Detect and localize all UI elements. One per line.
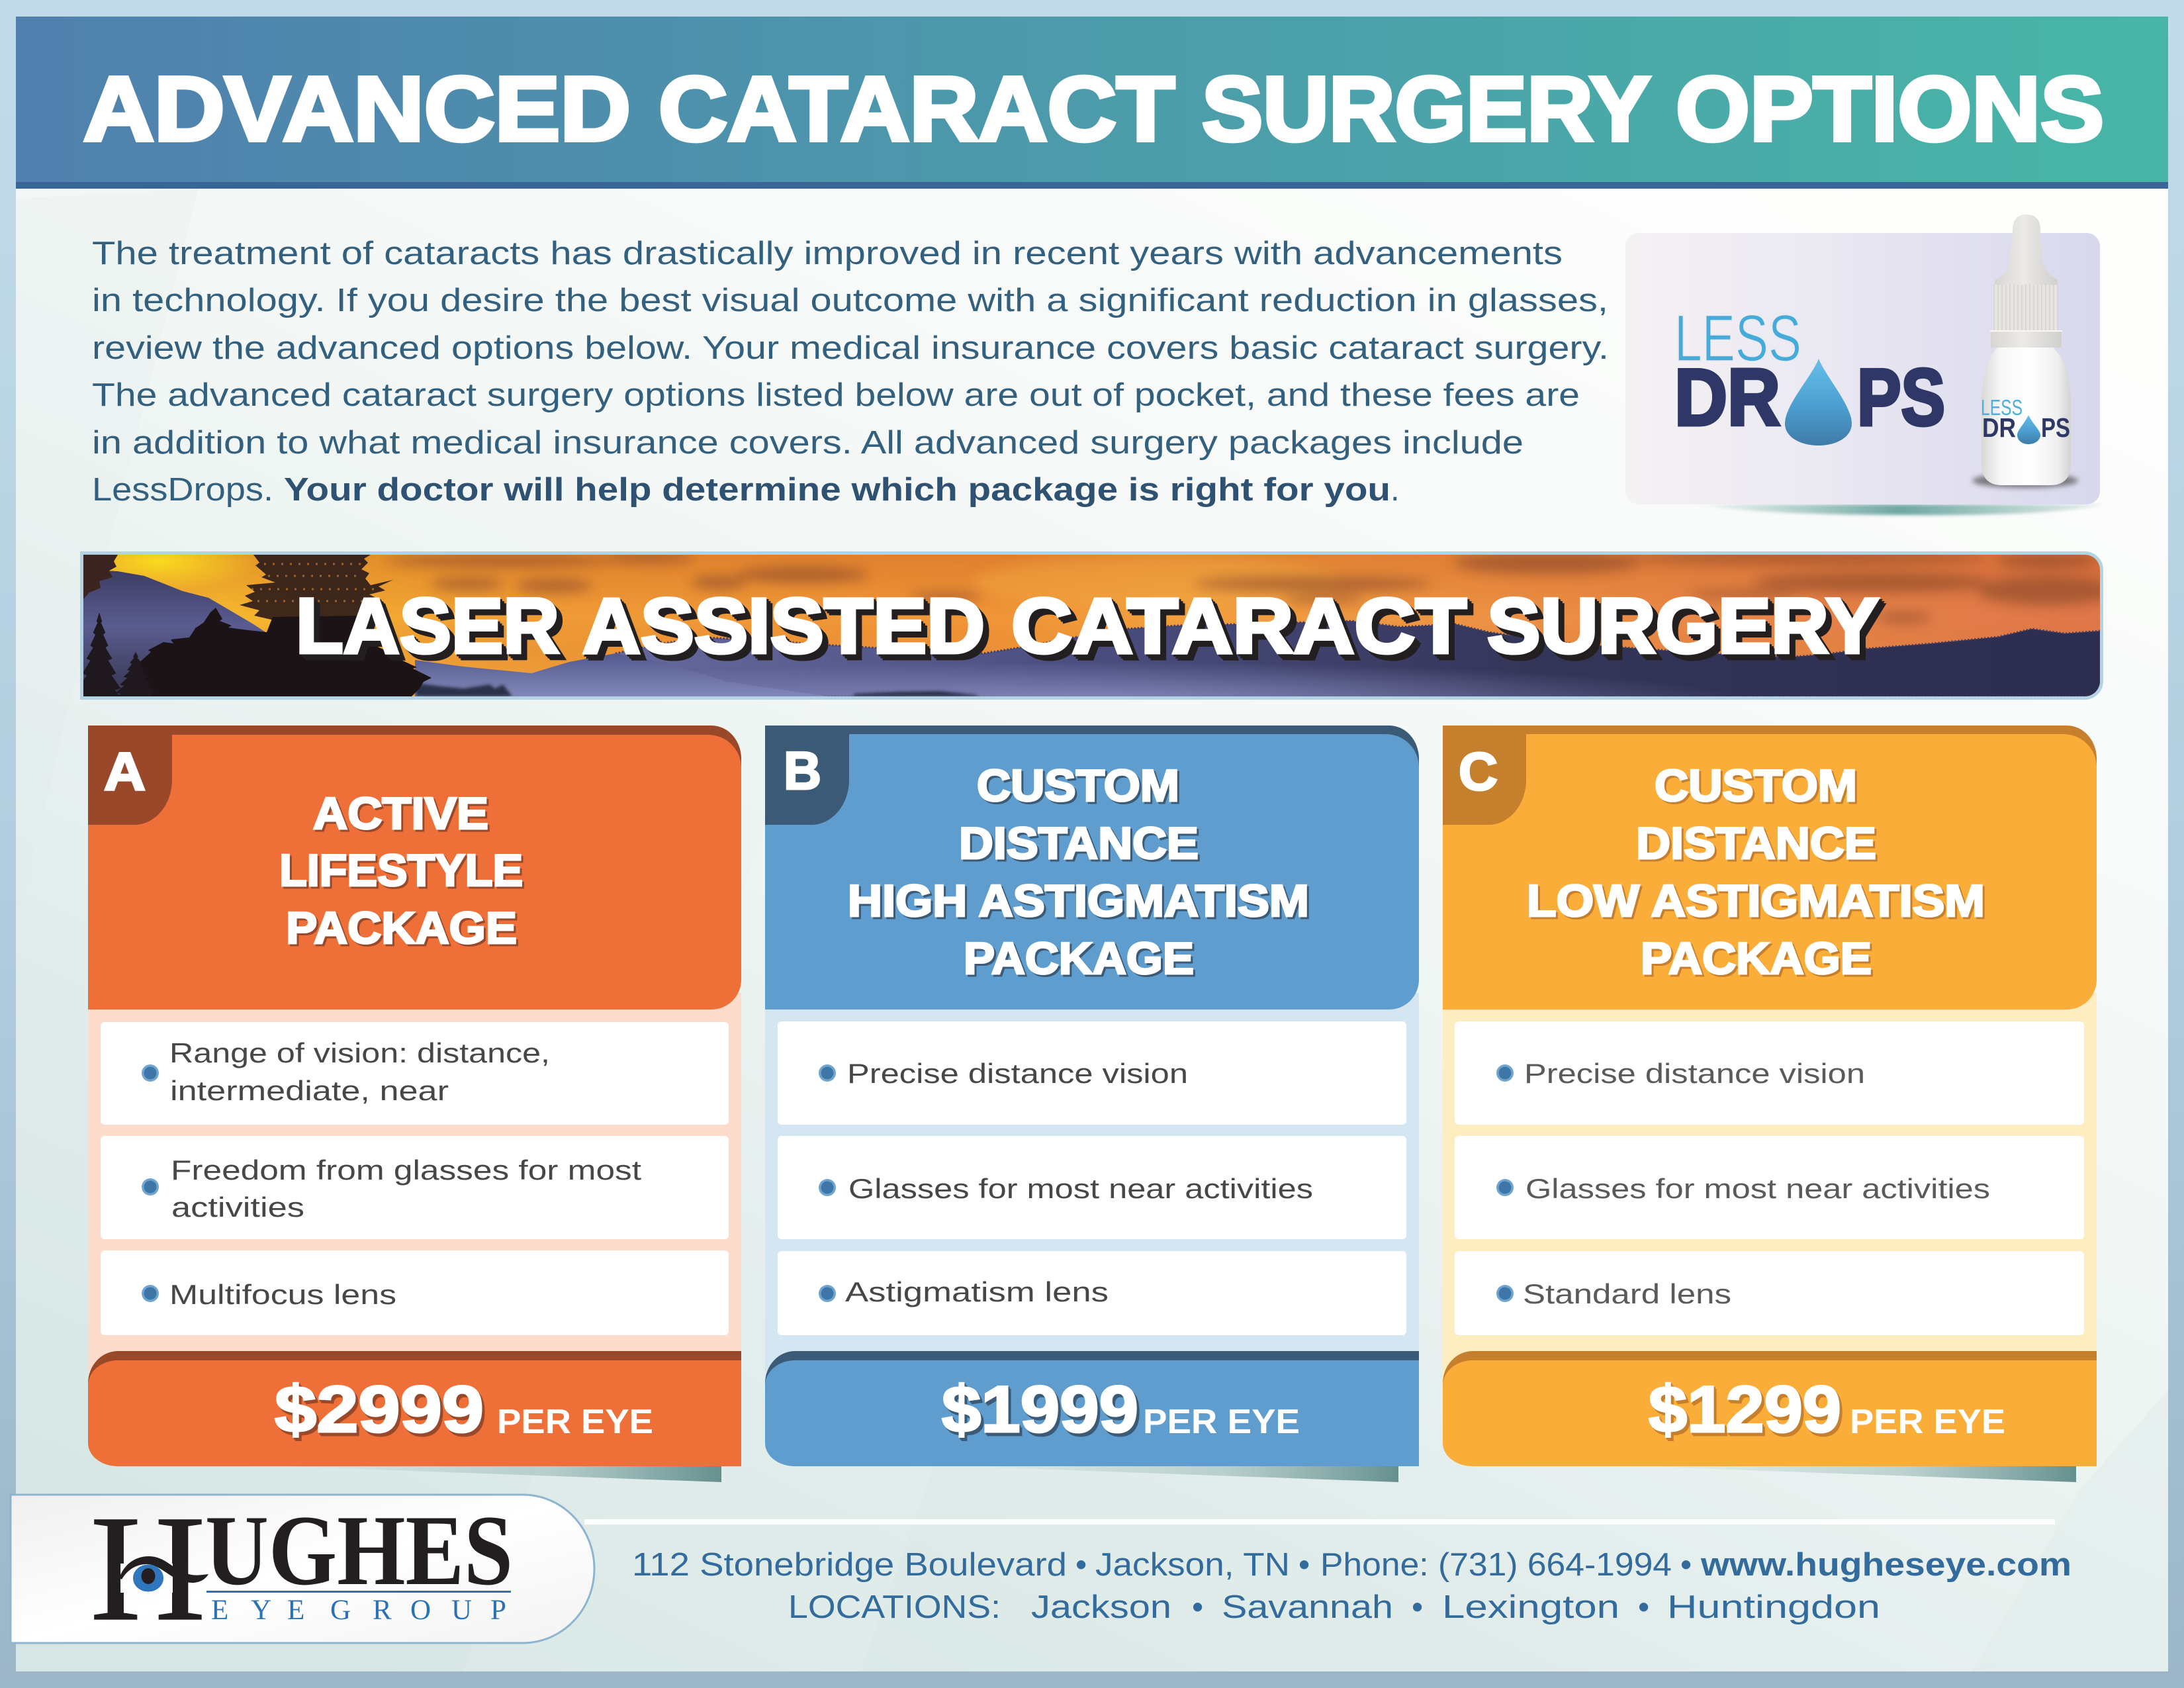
package B header: DISTANCE [959,818,1199,868]
package B price: PER EYE [1143,1403,1300,1441]
package C benefit: standard lens [1455,1251,2084,1335]
package B benefit: precise distance vision [778,1021,1406,1125]
contact details: • [1680,1547,1692,1583]
title: ADVANCED [83,58,631,160]
locations: Lexington [1442,1589,1619,1625]
package C price [1443,1351,2097,1466]
package C header: DISTANCE [1636,818,1876,868]
bottle label: LESS [1981,395,2023,420]
intro paragraph: in addition to what medical insurance covers. All advanced surgery packages include [92,425,1524,461]
footer divider [584,1519,2055,1524]
Hughes Eye Group logo: UGHES [205,1495,513,1606]
pine trees [72,555,432,705]
package C benefit: glasses for near [1455,1136,2084,1239]
sunset photo [83,555,2100,696]
package A benefit: range of vision [101,1022,729,1125]
package B benefit: precise distance vision: Precise distance vision [847,1058,1188,1089]
package C header: PACKAGE [1641,933,1872,984]
locations: • [1638,1589,1649,1625]
contact details: • [1075,1547,1087,1583]
intro paragraph: The advanced cataract surgery options listed below are out of pocket, and these fees are [92,377,1580,413]
bottle label: PS [2041,412,2070,443]
locations: Savannah [1222,1589,1393,1625]
contact details: Phone: (731) 664-1994 [1320,1547,1672,1583]
locations [788,1589,1880,1625]
package A benefit: freedom from glasses: activities [171,1192,304,1223]
package B benefit: astigmatism lens [778,1251,1406,1335]
Hughes Eye Group logo: EYE GROUP [211,1595,506,1626]
package A price: $2999 [275,1372,484,1446]
bottle label [1981,395,2070,444]
package B header: HIGH ASTIGMATISM [848,876,1309,926]
locations: • [1192,1589,1203,1625]
package B header: PACKAGE [964,933,1194,984]
panel: package C [1443,726,2097,1482]
panel: package B [765,726,1419,1482]
intro paragraph [92,236,1609,508]
LessDrops product card [1625,214,2105,515]
contact details: • [1298,1547,1310,1583]
title: SURGERY [1202,58,1651,160]
title bar [16,17,2168,189]
package A header: PACKAGE [286,903,517,953]
intro paragraph: . [1390,472,1400,508]
package A header [88,726,741,1009]
package A header: LIFESTYLE [279,845,523,896]
locations: • [1412,1589,1423,1625]
package A price [88,1351,741,1466]
package C header: LOW ASTIGMATISM [1527,876,1985,926]
package A price: PER EYE [497,1403,653,1441]
contact details [632,1547,2071,1583]
panel: package A [88,726,741,1482]
banner heading: ASSISTED [582,583,985,670]
intro paragraph: review the advanced options below. Your medical insurance covers basic cataract surgery. [92,330,1609,366]
package C header: CUSTOM [1655,761,1857,811]
LessDrops logo: DR [1674,352,1780,442]
locations: Huntingdon [1667,1589,1880,1625]
package B header: CUSTOM [977,761,1179,811]
package A benefit: multifocus lens [101,1250,729,1335]
package C benefit: standard lens: Standard lens [1523,1278,1731,1309]
package B header [765,726,1419,1009]
package A benefit: range of vision: intermediate, near [170,1075,449,1106]
package A benefit: freedom from glasses [101,1136,729,1239]
LessDrops logo [1674,301,1945,445]
package C benefit: glasses for near: Glasses for most near activities [1525,1173,1990,1204]
left hill [79,569,273,696]
package A header: ACTIVE [313,788,488,839]
intro paragraph: Your doctor will help determine which package is right for you [284,472,1390,508]
intro paragraph: in technology. If you desire the best visual outcome with a significant reduction in glasses, [92,283,1608,318]
logo plate [11,1484,594,1652]
bottle label: DR [1982,412,2016,443]
banner: laser assisted cataract surgery [80,551,2103,700]
package B benefit: glasses for near [778,1136,1406,1239]
intro paragraph: LessDrops. [92,472,273,508]
package C header [1443,726,2097,1009]
package B benefit: astigmatism lens: Astigmatism lens [845,1276,1109,1307]
package C benefit: precise distance vision: Precise distance vision [1524,1058,1865,1089]
contact details: Jackson, TN [1095,1547,1290,1583]
banner heading: CATARACT [1011,583,1467,670]
package A benefit: multifocus lens: Multifocus lens [169,1279,396,1310]
LessDrops logo: PS [1857,352,1945,442]
package B benefit: glasses for near: Glasses for most near activities [848,1173,1313,1204]
package C benefit: precise distance vision [1455,1021,2084,1125]
banner heading [296,583,1879,670]
eye drop bottle [1972,214,2078,488]
locations: Jackson [1031,1589,1171,1625]
title: OPTIONS [1676,58,2104,160]
banner heading: SURGERY [1487,583,1879,670]
package B price [765,1351,1419,1466]
package C price: $1299 [1649,1372,1841,1446]
intro paragraph: The treatment of cataracts has drastically improved in recent years with advancements [92,236,1563,271]
banner heading: LASER [296,583,559,670]
package A benefit: range of vision: Range of vision: distance, [169,1037,550,1068]
contact details: 112 Stonebridge Boulevard [632,1547,1067,1583]
LessDrops logo: LESS [1674,301,1801,375]
Hughes Eye Group logo: H [90,1484,206,1652]
title [83,58,2104,160]
icon: eye [119,1556,208,1593]
package B price: $1999 [942,1372,1138,1446]
package A benefit: freedom from glasses: Freedom from glasses for most [171,1154,641,1186]
Hughes Eye Group logo [90,1484,513,1652]
package C header: C [1459,742,1498,802]
package C price: PER EYE [1850,1403,2005,1441]
locations: LOCATIONS: [788,1589,1001,1625]
front ridge [415,653,829,696]
far ridge [615,621,2101,696]
package A header: A [104,742,146,802]
title: CATARACT [659,58,1175,160]
package B header: B [784,741,821,801]
contact details: www.hugheseye.com [1700,1547,2071,1583]
